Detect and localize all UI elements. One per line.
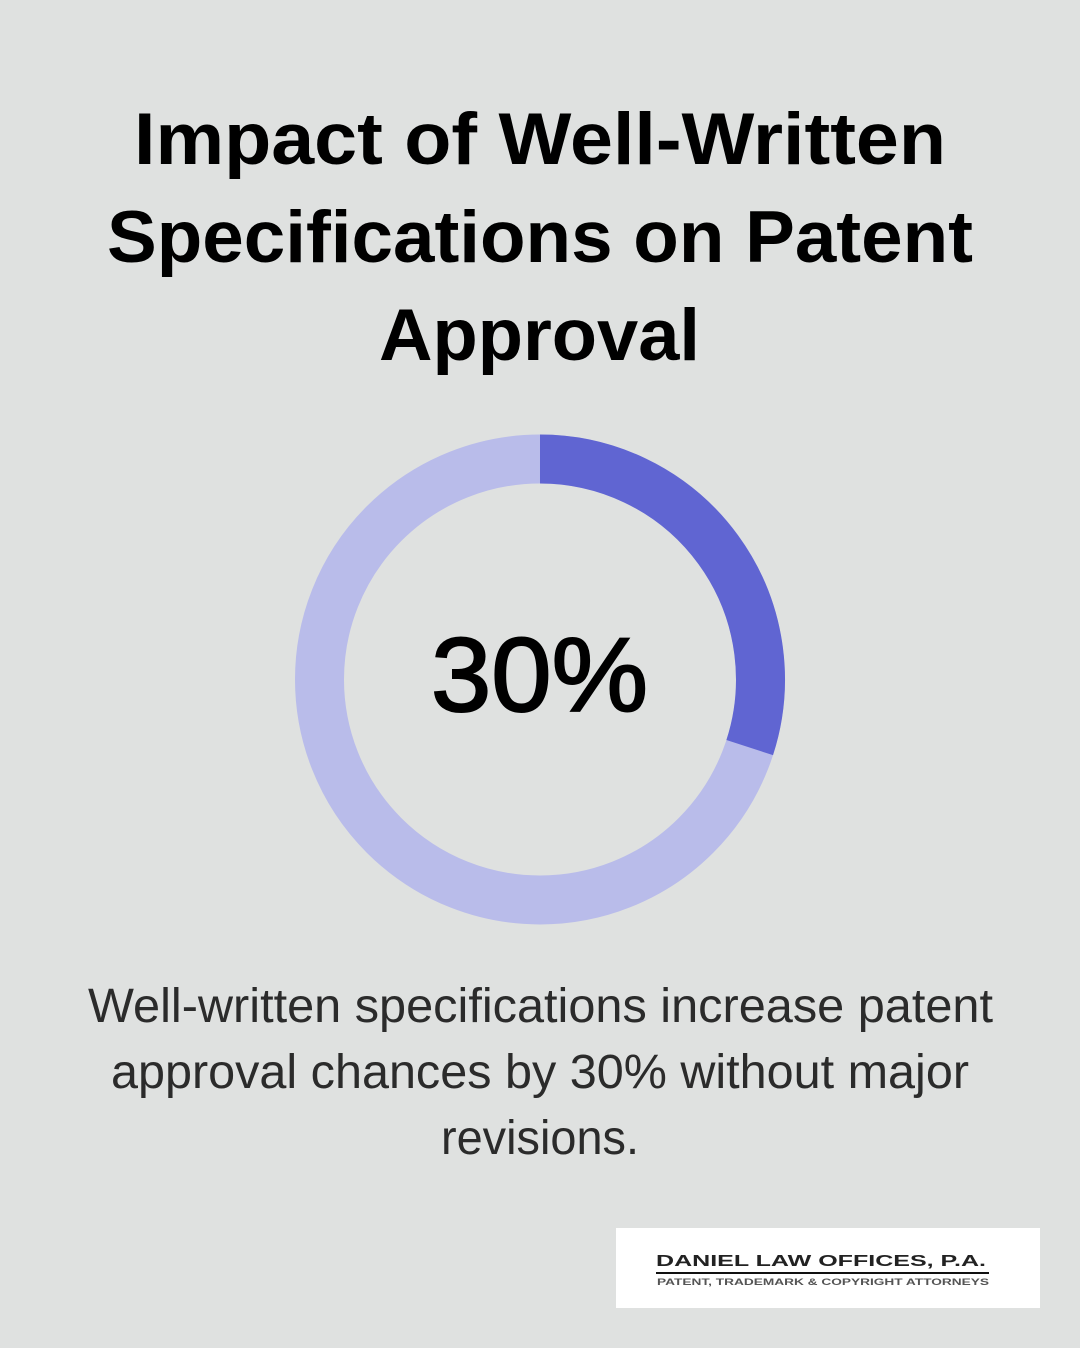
description text (88, 980, 993, 1165)
logo: Daniel Law Offices (616, 1228, 1040, 1308)
logo: Daniel Law Offices: DANIEL LAW OFFICES, P.A. (656, 1253, 986, 1270)
center value: 30% (431, 617, 648, 734)
logo: Daniel Law Offices: PATENT, TRADEMARK & COPYRIGHT ATTORNEYS (657, 1277, 989, 1288)
title: Approval (379, 295, 700, 376)
description text: approval chances by 30% without major (111, 1046, 969, 1099)
title: Impact of Well-Written (134, 99, 946, 180)
description text: Well-written specifications increase patent (88, 980, 993, 1033)
title: Specifications on Patent (107, 197, 973, 278)
description text: revisions. (441, 1112, 639, 1165)
title (107, 99, 973, 376)
donut chart: 30% (320, 459, 760, 900)
